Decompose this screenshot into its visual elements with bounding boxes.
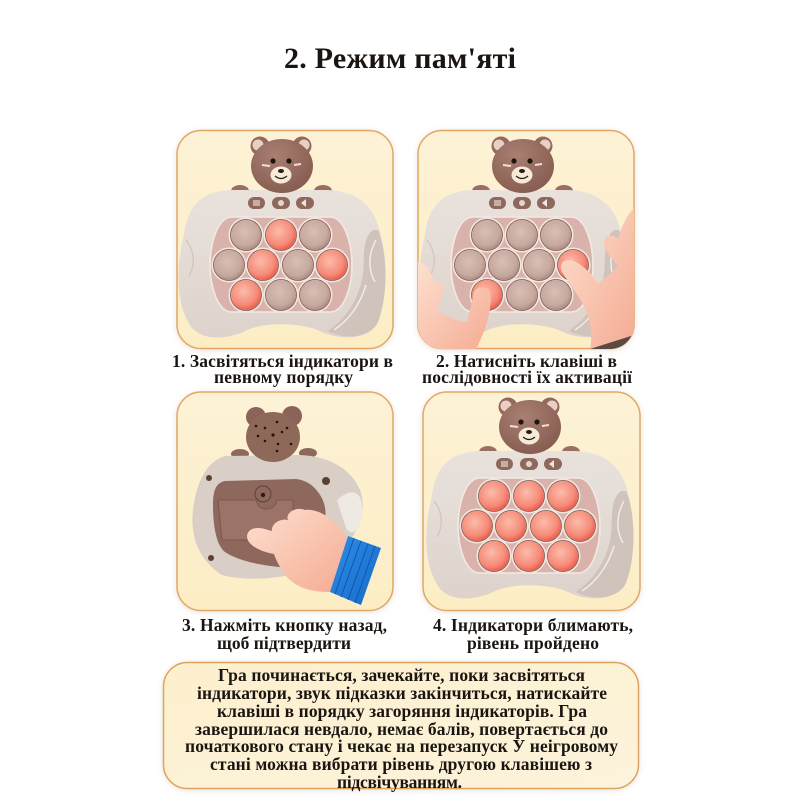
panel: step 4 <box>423 392 640 610</box>
caption 4: 4. Індикатори блимають, <box>433 615 633 635</box>
panel 3 background <box>177 392 393 610</box>
push buttons with pressed indicators <box>455 220 588 310</box>
toy back <box>192 406 363 579</box>
caption 3: 3. Нажміть кнопку назад, <box>182 615 387 635</box>
caption 4: рівень пройдено <box>467 633 599 653</box>
toy and hands <box>418 136 634 349</box>
hand pressing <box>247 509 347 592</box>
title: 2. Режим пам'яті <box>284 42 516 75</box>
blue cuff <box>330 536 381 605</box>
panel 1 background <box>177 130 393 348</box>
description text: Гра починається, зачекайте, поки засвітяться <box>218 665 585 685</box>
description text <box>185 665 618 792</box>
description text: індикатори, звук підказки закінчиться, натискайте <box>197 683 607 703</box>
caption 1 <box>172 351 393 387</box>
description text: стані можна вибрати рівень другою клавішею з <box>210 754 592 774</box>
right hand <box>561 208 634 349</box>
description box <box>164 662 638 792</box>
panel: step 2 <box>418 130 634 349</box>
toy front <box>178 136 386 337</box>
caption 2: послідовності їх активації <box>422 367 632 387</box>
push buttons with lit indicators <box>214 220 347 310</box>
all push buttons lit <box>462 481 595 571</box>
toy front <box>426 398 634 598</box>
panel 2 background <box>418 130 634 348</box>
caption 1: 1. Засвітяться індикатори в <box>172 351 393 371</box>
panel: step 3 <box>177 392 393 610</box>
description text: клавіші в порядку загоряння індикаторів. Гра <box>217 701 587 721</box>
toy front <box>419 136 626 337</box>
description background <box>164 662 638 788</box>
caption 2 <box>422 351 632 387</box>
description text: завершилася невдало, немає балів, повертається до <box>195 719 608 739</box>
right sleeve <box>590 335 634 349</box>
description text: початкового стану і чекає на перезапуск У неігровому <box>185 736 618 756</box>
caption 1: певному порядку <box>214 367 353 387</box>
description text: підсвічуванням. <box>337 772 462 792</box>
left hand <box>418 262 491 349</box>
caption 3 <box>182 615 387 653</box>
caption 4 <box>433 615 633 653</box>
panel: step 1 <box>177 130 393 348</box>
caption 2: 2. Натисніть клавіші в <box>436 351 617 371</box>
caption 3: щоб підтвердити <box>217 633 351 653</box>
panel 4 background <box>423 392 640 610</box>
